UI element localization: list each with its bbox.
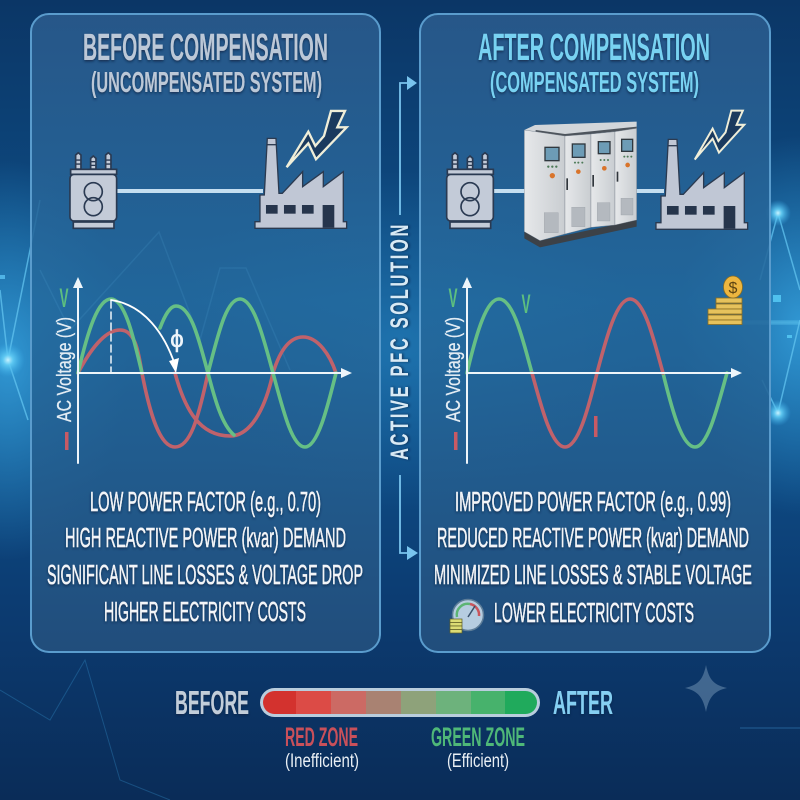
arrow: down to after panel bbox=[400, 475, 418, 560]
text: active PFC solution: ACTIVE PFC SOLUTION bbox=[386, 222, 414, 460]
chart: phase-shifted voltage and current waves bbox=[73, 277, 352, 463]
wave: voltage green bbox=[467, 299, 727, 447]
heading: before: (UNCOMPENSATED SYSTEM) bbox=[91, 67, 322, 99]
heading: after bbox=[478, 27, 710, 99]
label: axis: AC Voltage (V) bbox=[443, 317, 465, 422]
list: before outcomes: HIGHER ELECTRICITY COSTS bbox=[104, 596, 306, 627]
heading: before: BEFORE COMPENSATION bbox=[83, 27, 328, 69]
icon: PFC cabinet bbox=[524, 122, 637, 247]
wave: current red bbox=[78, 330, 336, 447]
label: before: BEFORE bbox=[175, 684, 249, 721]
arrow: up to after panel bbox=[400, 76, 417, 215]
icon: coins bbox=[708, 276, 742, 324]
list: before outcomes bbox=[47, 486, 363, 627]
label: green zone: GREEN ZONE bbox=[431, 722, 525, 752]
label: inefficient: (Inefficient) bbox=[285, 751, 359, 772]
label: wave I bbox=[594, 416, 598, 437]
icon: gauge and coins bbox=[450, 600, 484, 633]
axes bbox=[467, 284, 734, 463]
heading: before bbox=[83, 27, 328, 99]
list: after outcomes bbox=[434, 486, 752, 628]
panel: after compensation: V bbox=[522, 289, 530, 319]
panel: after compensation bbox=[420, 14, 770, 652]
panel: before compensation bbox=[31, 14, 380, 652]
list: before outcomes: SIGNIFICANT LINE LOSSES & VOLTAGE DROP bbox=[47, 559, 363, 590]
phase arc bbox=[111, 300, 175, 365]
label: red zone: RED ZONE bbox=[285, 722, 358, 752]
axes bbox=[78, 284, 344, 463]
label: efficient: (Efficient) bbox=[447, 751, 509, 772]
panel: after compensation: V bbox=[448, 283, 458, 313]
label: I bbox=[454, 432, 458, 450]
chart: in-phase voltage and current waves bbox=[462, 277, 742, 463]
legend: before to after scale bbox=[175, 684, 613, 772]
wave: voltage green bbox=[78, 299, 336, 447]
label: phi: ϕ bbox=[170, 326, 184, 353]
diagram: transformer to factory bbox=[70, 111, 347, 228]
icon: decorative sparkle bbox=[685, 665, 727, 712]
scale bar bbox=[260, 688, 540, 717]
icon: coins: $ bbox=[729, 280, 738, 297]
label: after: AFTER bbox=[553, 684, 613, 721]
list: before outcomes: HIGH REACTIVE POWER (kvar) DEMAND bbox=[65, 522, 346, 553]
list: before outcomes: LOW POWER FACTOR (e.g., 0.70) bbox=[90, 486, 321, 517]
label: I bbox=[65, 432, 68, 450]
wave: current red bbox=[532, 299, 663, 447]
panel: before compensation: V bbox=[60, 283, 68, 313]
diagram: transformer, cabinet, factory bbox=[447, 111, 748, 247]
label: axis: AC Voltage (V) bbox=[54, 317, 76, 422]
center label: active PFC solution bbox=[386, 76, 418, 560]
